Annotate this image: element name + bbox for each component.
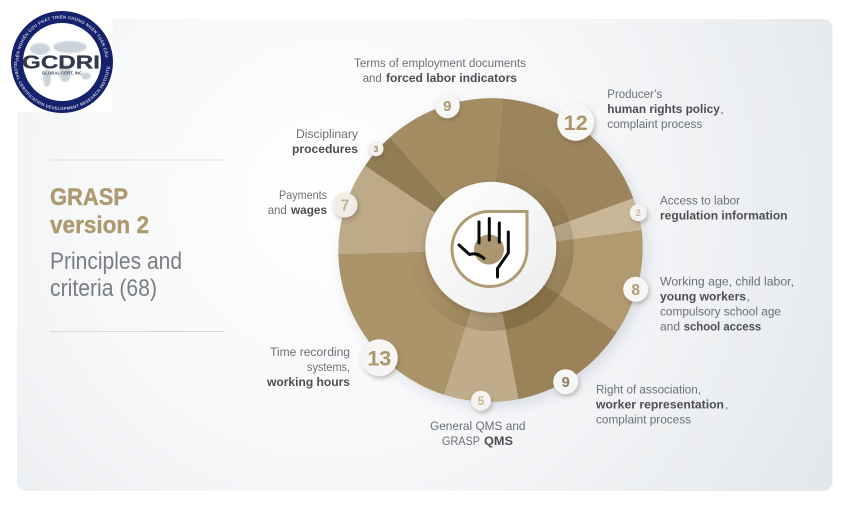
label: terms of employment xyxy=(354,56,526,85)
badge: 5 QMS xyxy=(471,391,491,411)
label: time recording: Time recording xyxy=(270,345,350,359)
badge: 12 human rights policy: 12 xyxy=(564,111,588,135)
label: payments and wages xyxy=(268,188,327,217)
label: general QMS: GRASP xyxy=(442,434,480,448)
badge: 7 payments xyxy=(332,192,358,218)
label: working age and child labor xyxy=(660,274,794,334)
badge: 12 human rights policy xyxy=(557,104,594,141)
label: terms of employment: Terms of employment documents xyxy=(354,56,526,70)
label: general QMS: QMS xyxy=(484,434,513,448)
subheading: principles and criteria: criteria (68) xyxy=(50,275,157,302)
logo wordmark: GCDRI xyxy=(22,52,100,72)
heading: GRASP version 2: GRASP xyxy=(50,184,128,211)
logo ring text xyxy=(14,14,110,110)
badge: 7 payments: 7 xyxy=(341,198,349,214)
panel: title block xyxy=(50,160,224,332)
badge: 9 terms of employment: 9 xyxy=(443,98,451,115)
label: human rights policy: , xyxy=(720,102,724,116)
label: disciplinary procedures xyxy=(292,127,359,156)
label: terms of employment: and xyxy=(363,71,382,85)
label: general QMS xyxy=(430,419,526,448)
badge: 3 disciplinary: 3 xyxy=(374,144,379,154)
logo world map xyxy=(30,41,91,87)
logo: GCDRI: GLOBAL CERT, INC xyxy=(42,70,82,76)
label: working age and child labor: and xyxy=(660,320,680,334)
label: payments and wages: Payments xyxy=(279,188,327,202)
label: working age and child labor: Working age, child labor, xyxy=(660,274,794,288)
logo ring text: VIỆN NGHIÊN CỨU PHÁT TRIỂN CHỨNG NHẬN TOÀN CẦU xyxy=(15,14,108,62)
label: general QMS: General QMS and xyxy=(430,419,526,433)
badge: 2 labor regulation: 2 xyxy=(636,208,641,218)
label: right of association xyxy=(595,382,728,426)
heading: GRASP version 2: version 2 xyxy=(50,212,149,239)
badge: 9 right of association xyxy=(553,369,578,394)
label: right of association: Right of association, xyxy=(596,382,701,396)
label: payments and wages: wages xyxy=(290,203,327,217)
label: human rights policy: Producer’s xyxy=(607,87,662,101)
badge: 8 working age: 8 xyxy=(631,282,640,299)
pie chart: 68 criteria by topic xyxy=(338,98,643,402)
subheading: principles and criteria xyxy=(50,248,182,302)
icon: hand in drop xyxy=(452,212,527,286)
label: time recording xyxy=(266,345,350,389)
label: human rights policy: complaint process xyxy=(607,117,702,131)
badge: 9 terms of employment xyxy=(435,93,460,118)
label: time recording: working hours xyxy=(266,375,350,389)
label: time recording: systems, xyxy=(307,360,350,374)
label: right of association: complaint process xyxy=(596,412,691,426)
logo: GCDRI xyxy=(11,11,113,113)
label: working age and child labor: school access xyxy=(684,320,761,334)
badge: 2 labor regulation xyxy=(630,204,647,221)
center disc xyxy=(425,182,556,313)
badge: 3 disciplinary xyxy=(368,141,384,156)
badge: 5 QMS: 5 xyxy=(478,394,485,408)
label: working age and child labor: , xyxy=(746,290,750,304)
label: access to labor regulation: Access to labor xyxy=(660,194,740,208)
heading: GRASP version 2 xyxy=(50,184,149,239)
subheading: principles and criteria: Principles and xyxy=(50,248,182,275)
label: access to labor regulation: regulation information xyxy=(660,208,788,222)
logo ring text: GLOBAL CERTIFICATION DEVELOPMENT RESEARCH INSTITUTE xyxy=(14,62,110,110)
badge: 8 working age xyxy=(623,277,648,302)
label: human rights policy xyxy=(607,87,724,131)
label: terms of employment: forced labor indicators xyxy=(386,71,517,85)
badge: 13 working hours xyxy=(361,339,398,376)
label: disciplinary procedures: procedures xyxy=(292,142,358,156)
label: right of association: worker representation xyxy=(595,398,724,412)
label: access to labor regulation xyxy=(660,194,788,222)
label: payments and wages: and xyxy=(268,203,287,217)
label: working age and child labor: compulsory school age xyxy=(660,304,781,318)
label: right of association: , xyxy=(725,398,728,412)
badge: 9 right of association: 9 xyxy=(562,374,570,391)
label: disciplinary procedures: Disciplinary xyxy=(296,127,359,141)
label: working age and child labor: young workers xyxy=(660,290,746,304)
badge: 13 working hours: 13 xyxy=(367,346,391,370)
label: human rights policy: human rights policy xyxy=(607,102,720,116)
pie segments xyxy=(338,98,643,402)
